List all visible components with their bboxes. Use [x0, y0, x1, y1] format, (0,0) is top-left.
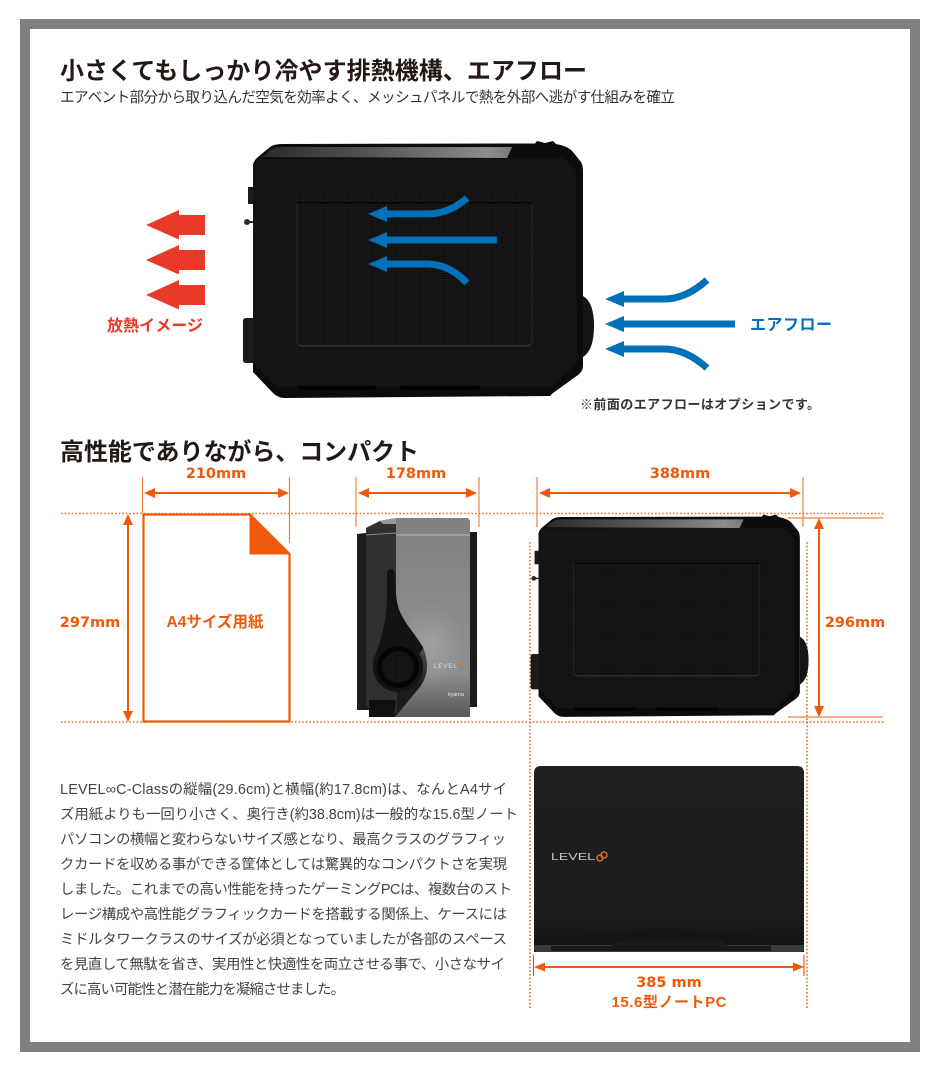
width dimension: 210mm: 210mm	[186, 466, 246, 482]
height dimension: 297mm	[60, 514, 133, 722]
body text: パソコンの横幅と変わらないサイズ感となり、最高クラスのグラフィッ	[60, 831, 506, 848]
heat exhaust label: 放熱イメージ	[107, 317, 203, 335]
notebook width dimension	[534, 955, 804, 1011]
title: compact: 高性能でありながら、コンパクト	[60, 438, 419, 466]
body text: を見直して無駄を省き、実用性と快適性を両立させる事で、小さなサイ	[60, 956, 505, 973]
width dimension: 178mm: 178mm	[386, 466, 446, 482]
A4 paper size	[144, 514, 290, 722]
dotted guide lines	[61, 514, 885, 1010]
airflow note: ※前面のエアフローはオプションです。	[580, 397, 820, 412]
title: airflow: 小さくてもしっかり冷やす排熱機構、エアフロー	[60, 58, 587, 85]
inner airflow arrows	[368, 198, 497, 283]
PC case front view: LEVEL	[434, 664, 458, 670]
body text	[60, 781, 518, 998]
height dimension: 297mm: 297mm	[60, 615, 120, 631]
body text: レージ構成や高性能グラフィックカードを搭載する関係上、ケースには	[60, 905, 507, 923]
width dimension: 210mm	[142, 466, 290, 543]
PC case side view with airflow	[243, 141, 594, 398]
body text: ミドルタワークラスのサイズが必須となっていましたが各部のスペース	[60, 931, 507, 948]
front airflow arrows	[605, 280, 735, 368]
PC case front view	[357, 518, 477, 717]
heat exhaust arrows	[146, 210, 205, 310]
A4 paper size: A4サイズ用紙	[166, 612, 264, 631]
subtitle: airflow: エアベント部分から取り込んだ空気を効率よく、メッシュパネルで熱を外部へ逃がす仕組みを確立	[60, 89, 675, 106]
PC case side view, size comparison	[531, 515, 809, 717]
notebook width dimension: 15.6型ノートPC	[612, 994, 727, 1011]
notebook PC	[534, 766, 804, 952]
notebook width dimension: 385 mm	[636, 975, 702, 991]
notebook PC: LEVEL	[551, 852, 596, 863]
body text: LEVEL∞C-Classの縦幅(29.6cm)と横幅(約17.8cm)は、なんとA4サイ	[60, 781, 507, 798]
body text: ズ用紙よりも一回り小さく、奥行き(約38.8cm)は一般的な15.6型ノート	[60, 806, 518, 823]
height dimension: 296mm	[788, 518, 885, 717]
width dimension: 178mm	[356, 466, 479, 527]
height dimension: 296mm: 296mm	[825, 615, 885, 631]
airflow label: エアフロー	[750, 317, 832, 334]
width dimension: 388mm: 388mm	[650, 466, 710, 482]
body text: しました。これまでの高い性能を持ったゲーミングPCは、複数台のスト	[60, 881, 512, 898]
body text: ズに高い可能性と潜在能力を凝縮させました。	[60, 981, 345, 998]
body text: クカードを収める事ができる筐体としては驚異的なコンパクトさを実現	[60, 856, 508, 873]
width dimension: 388mm	[537, 466, 803, 527]
PC case front view: iiyama	[448, 692, 465, 698]
